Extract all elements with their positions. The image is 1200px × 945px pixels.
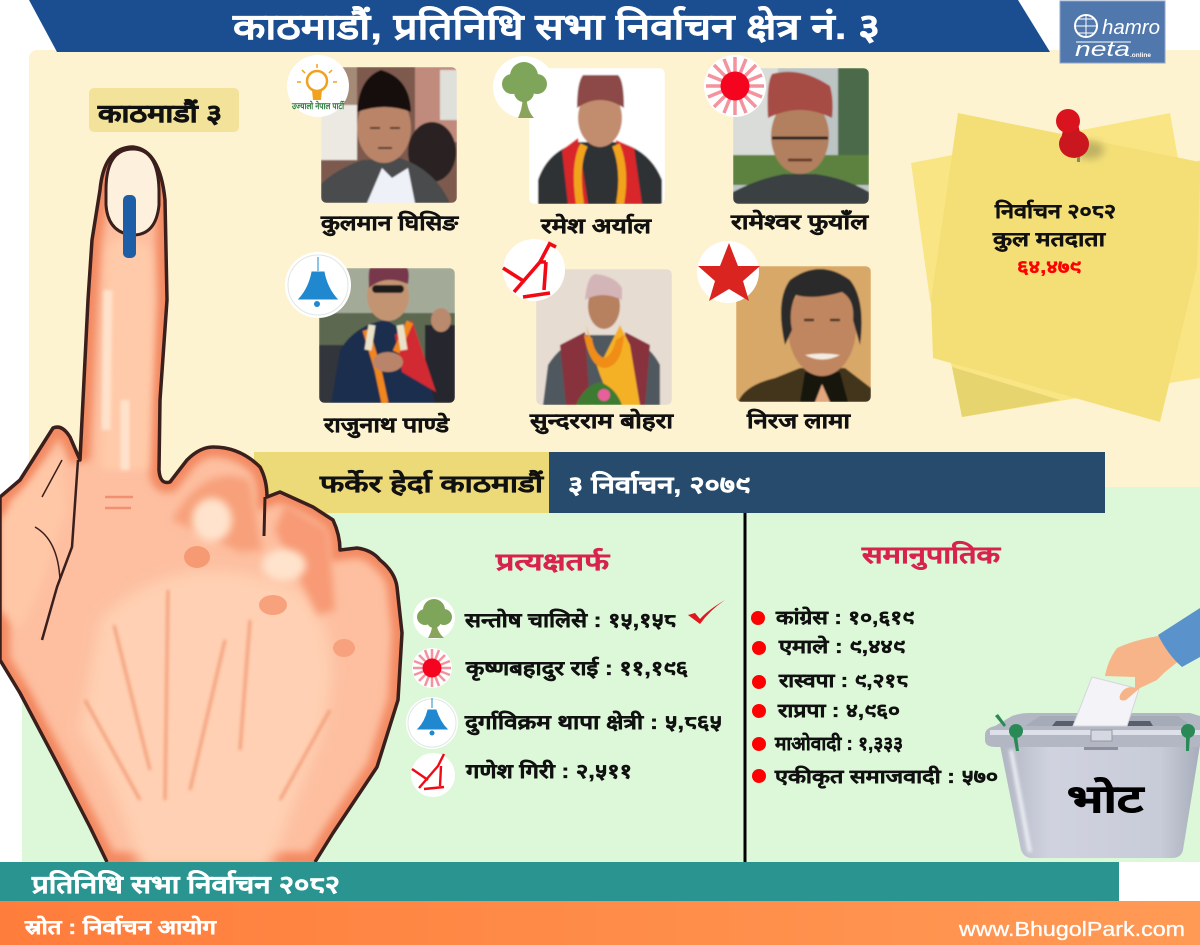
candidate: Kulman Ghising	[287, 55, 460, 237]
voter hand	[1105, 636, 1180, 700]
illustration: inked hand with raised finger	[0, 147, 402, 870]
illustration: ballot box with hand	[985, 608, 1200, 858]
badge: tree symbol	[493, 56, 555, 118]
row: RPP	[752, 701, 900, 722]
row: Congress: कांग्रेस : १०,६१९	[775, 606, 914, 629]
row: RSP	[752, 671, 908, 692]
badge: sun symbol	[704, 55, 766, 117]
row: Unified Socialist	[752, 765, 998, 789]
icon: red pin	[1056, 109, 1104, 162]
band: look back heading: फर्केर हेर्दा काठमाडौं	[319, 470, 544, 498]
row: Congress	[751, 606, 914, 629]
section: direct results	[406, 548, 725, 797]
label: constituency tag: काठमाडौं ३	[97, 99, 222, 128]
section: proportional results	[751, 541, 1002, 789]
row: Santosh Chalise	[413, 597, 725, 639]
box label: भोट	[1067, 777, 1146, 821]
name: रमेश अर्याल	[540, 213, 652, 238]
row: UML	[752, 635, 905, 658]
sleeve	[1158, 608, 1200, 667]
name: रामेश्वर फुयाँल	[730, 209, 869, 236]
candidate: Rajunath Pandey	[285, 252, 455, 439]
badge: bell symbol	[285, 252, 351, 318]
photo: Ramesh Aryal	[529, 68, 665, 204]
candidate: Niraj Lama	[697, 241, 871, 433]
row: Ganesh Giri	[411, 753, 632, 797]
badge: bulb party symbol: उज्यालो नेपाल पार्टी	[291, 100, 345, 111]
row: Krishna Bahadur Rai	[412, 648, 689, 688]
seals	[995, 714, 1195, 751]
logo: hamro neta	[1060, 1, 1165, 63]
panel: green lower background	[22, 487, 1200, 862]
band: look back heading	[254, 452, 1105, 513]
band: look back heading: ३ निर्वाचन, २०७९	[568, 471, 751, 499]
row: UML: एमाले : ९,४४९	[778, 635, 905, 658]
row: RPP: राप्रपा : ४,९६०	[777, 701, 900, 722]
row: Santosh Chalise: सन्तोष चालिसे : १५,१५८	[464, 608, 676, 632]
bar: teal election label	[0, 862, 1119, 901]
badge: bulb party symbol	[287, 55, 349, 117]
candidate: Rameshwor Phuyal	[704, 55, 869, 236]
badge: star symbol	[697, 241, 760, 303]
row: Durga Bikram Thapa	[406, 697, 722, 749]
number: voters: ६४,४७९	[1017, 257, 1082, 277]
title: काठमाडौं, प्रतिनिधि सभा निर्वाचन क्षेत्र नं. ३	[232, 6, 880, 47]
bar: teal election label: प्रतिनिधि सभा निर्वाचन २०८२	[31, 870, 340, 899]
name: निरज लामा	[746, 408, 852, 433]
ballot box lid	[985, 713, 1200, 747]
row: RSP: रास्वपा : ९,२१८	[778, 671, 908, 692]
divider: vertical	[744, 513, 746, 862]
name: राजुनाथ पाण्डे	[323, 412, 450, 439]
row: Krishna Bahadur Rai: कृष्णबहादुर राई : ११,१९६	[465, 656, 689, 682]
icon: red tick	[688, 600, 725, 624]
photo: Rajunath Pandey	[319, 268, 455, 403]
row: Unified Socialist: एकीकृत समाजवादी : ५७०	[774, 765, 998, 789]
photo: Rameshwor Phuyal	[733, 68, 869, 204]
title banner	[29, 0, 1050, 52]
photo: Kulman Ghising	[321, 67, 457, 203]
label: constituency tag	[89, 88, 239, 132]
badge: plough symbol	[503, 239, 565, 301]
row: Durga Bikram Thapa: दुर्गाविक्रम थापा क्षेत्री : ५,८६५	[464, 710, 722, 736]
website: www.BhugolPark.com	[958, 919, 1185, 941]
text: total voters: कुल मतदाता	[992, 229, 1106, 252]
logo: hamro neta: neta	[1075, 39, 1130, 61]
heading: प्रत्यक्षतर्फ	[495, 548, 611, 576]
heading: समानुपातिक	[861, 541, 1002, 570]
photo: Niraj Lama	[736, 266, 871, 402]
icon: nail with ink mark	[106, 149, 159, 258]
logo: hamro neta: .online	[1130, 52, 1151, 59]
sticky note with total voters	[911, 109, 1200, 422]
source: स्रोत : निर्वाचन आयोग	[24, 915, 217, 939]
photo: Sundar Ram Bohara	[536, 269, 672, 405]
candidate: Ramesh Aryal	[493, 56, 665, 238]
row: Maoist: माओवादी : १,३३३	[774, 732, 903, 755]
ballot box body	[1000, 745, 1200, 858]
row: Ganesh Giri: गणेश गिरी : २,५११	[465, 759, 632, 783]
name: कुलमान घिसिङ	[320, 210, 460, 237]
candidate: Sundar Ram Bohara	[503, 239, 675, 435]
logo: hamro neta: hamro	[1102, 17, 1160, 39]
text: election 2082: निर्वाचन २०८२	[994, 199, 1116, 223]
panel: cream upper background	[29, 50, 1200, 513]
name: सुन्दरराम बोहरा	[529, 408, 675, 435]
footer	[0, 901, 1200, 945]
ballot paper	[1073, 677, 1139, 726]
